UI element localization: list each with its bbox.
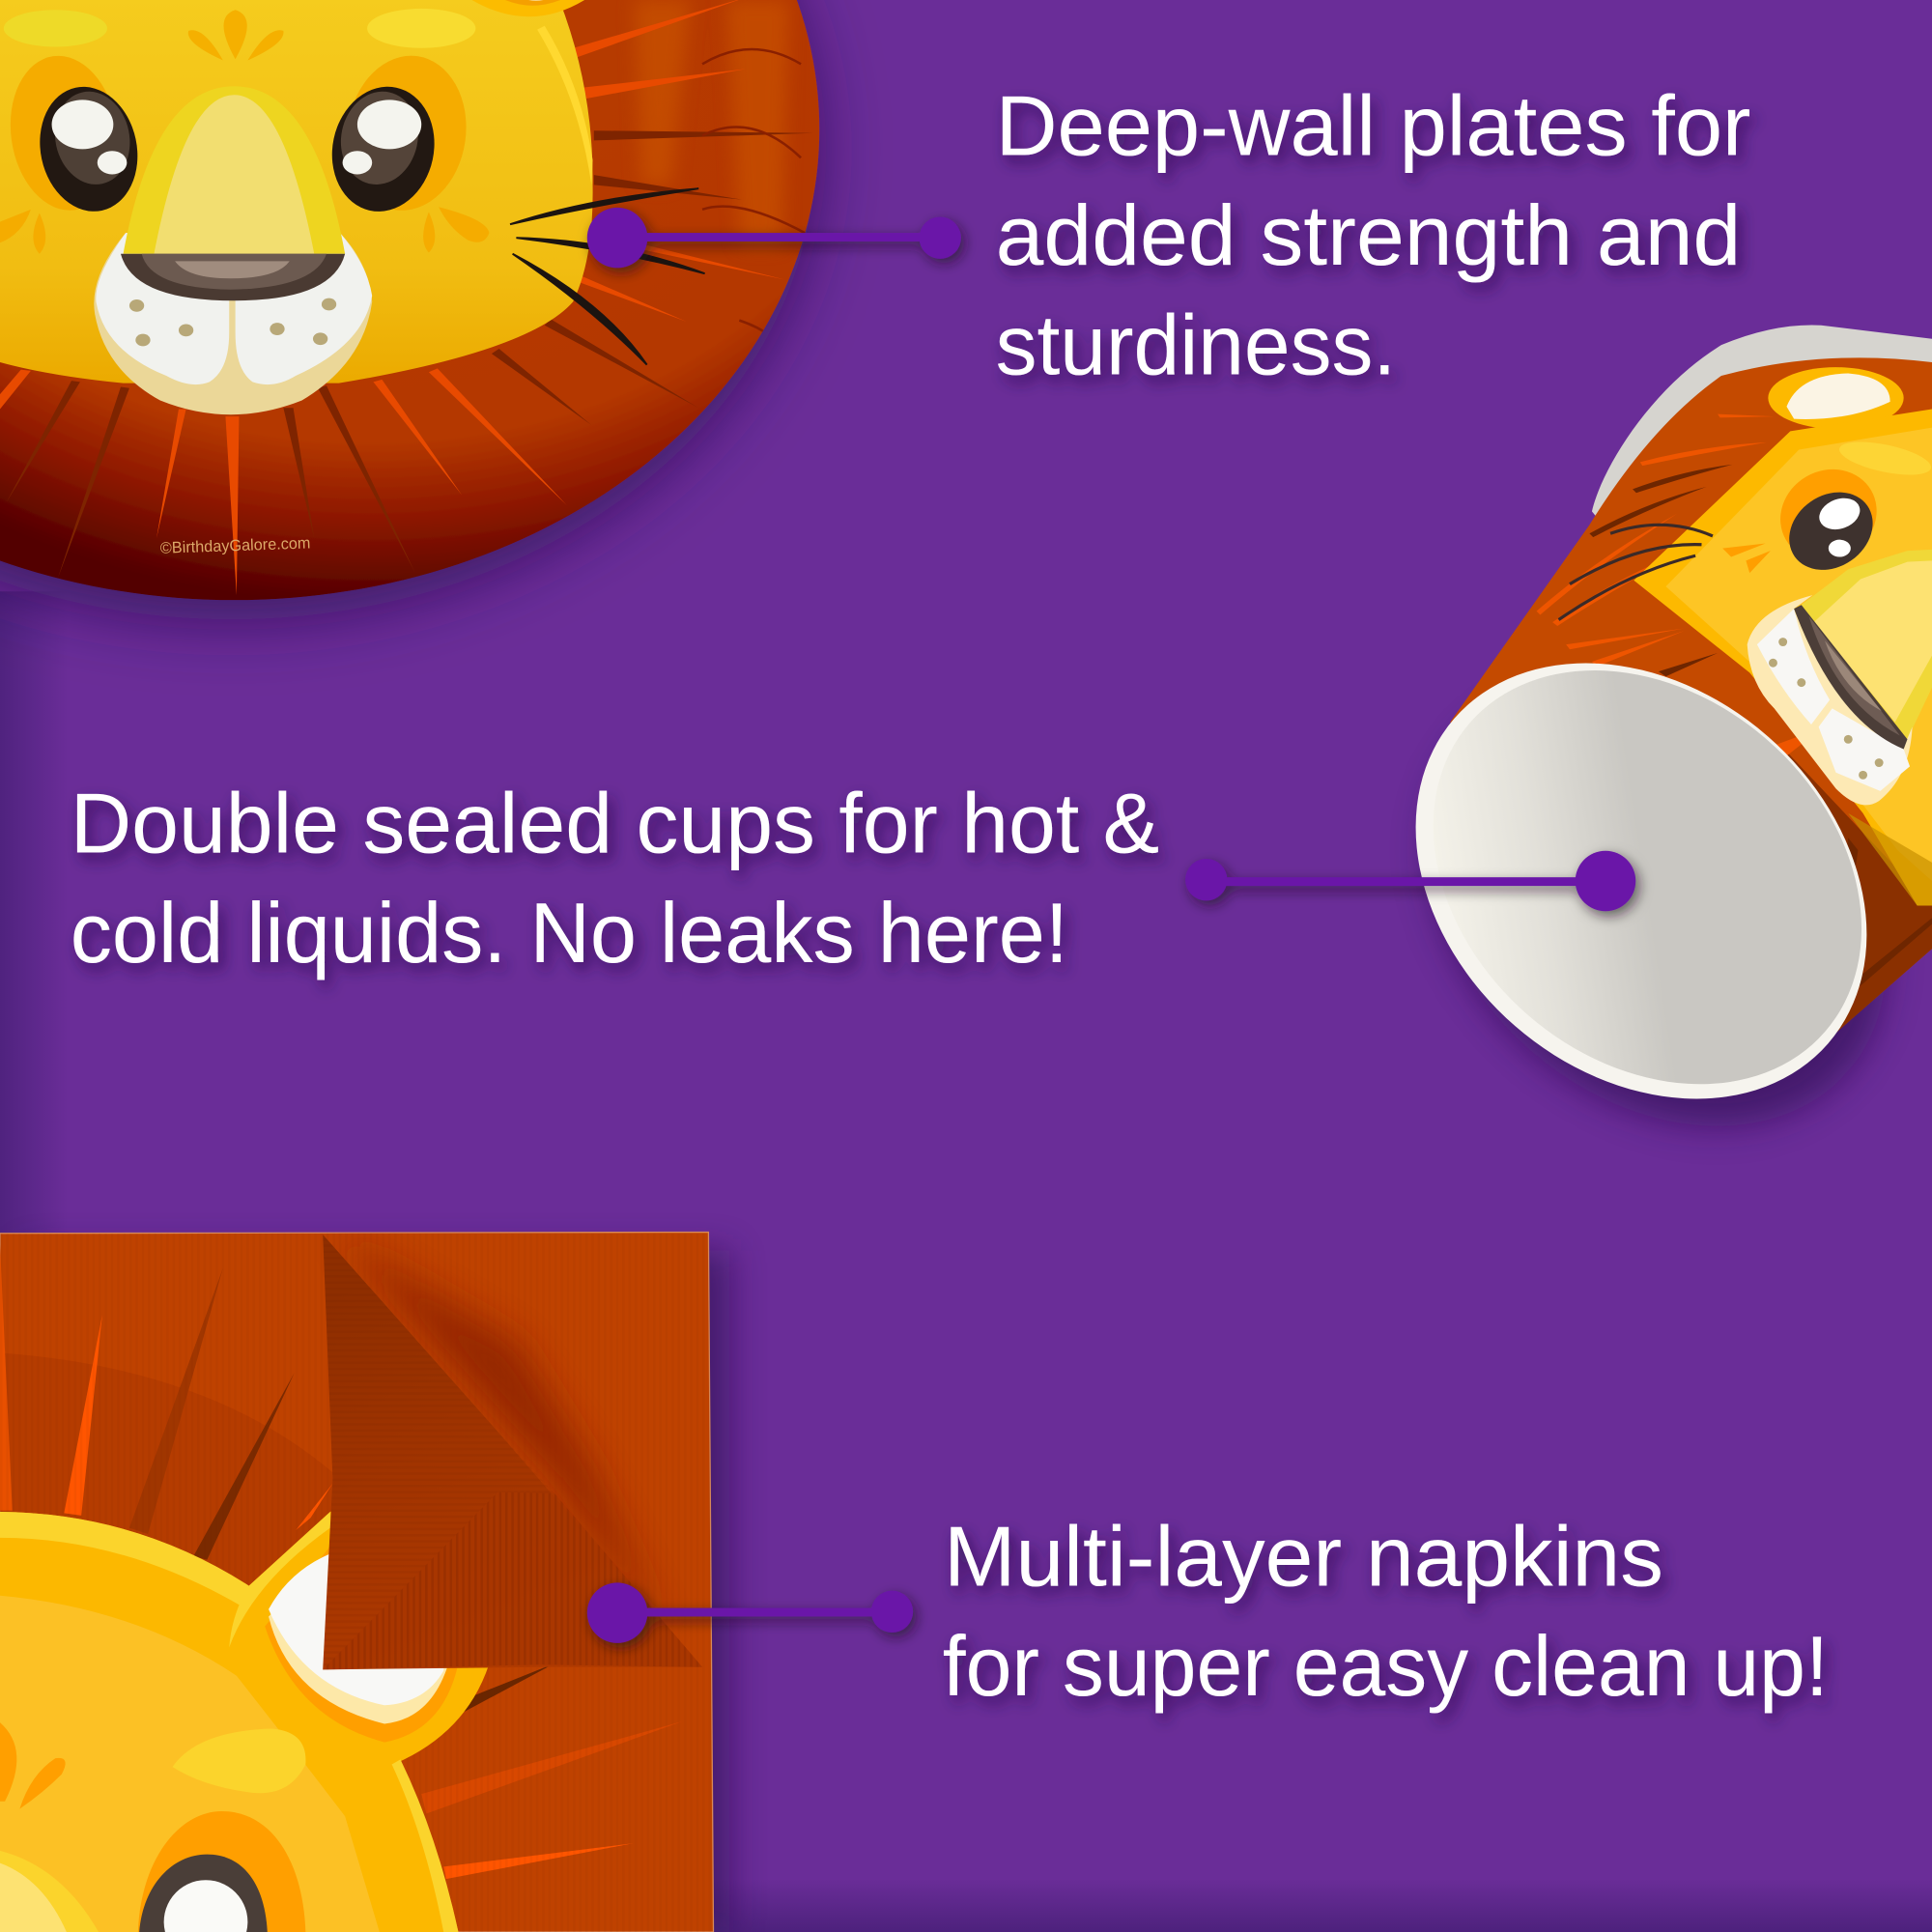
napkin sheet (0, 1233, 714, 1932)
cup eye (1780, 469, 1877, 545)
cup shadow (1341, 595, 1932, 1216)
head inner (0, 1596, 380, 1932)
cup mane (1787, 753, 1932, 1032)
napkin cheek highlight (173, 1729, 305, 1793)
plate (0, 0, 819, 600)
text: plates: added strength and (996, 187, 1741, 283)
nose (121, 86, 345, 300)
cheek marks (0, 207, 489, 254)
cup rim (1592, 325, 1932, 518)
fold shadow (355, 1246, 653, 1600)
cup base outer rim (1328, 574, 1932, 1188)
cup whiskers (1559, 525, 1713, 620)
connector: plate (587, 208, 961, 268)
cup muzzle (1747, 595, 1913, 805)
connector: napkin (587, 1582, 913, 1643)
text: plates: Deep-wall plates for (996, 78, 1750, 174)
plate copyright text: ©BirthdayGalore.com (160, 533, 311, 557)
text: napkins: for super easy clean up! (943, 1618, 1829, 1714)
text: plates (996, 78, 1750, 393)
forehead marks (188, 10, 284, 60)
ear (462, 0, 594, 16)
connector: cup (1185, 851, 1635, 911)
cup ear (1768, 367, 1904, 429)
napkin forehead marks (0, 1722, 66, 1808)
right eye (321, 48, 476, 221)
cup lion face (1634, 409, 1932, 906)
cup body (1450, 357, 1932, 1052)
napkin lion head and ear (0, 1491, 493, 1932)
whiskers (510, 188, 705, 365)
lion face (0, 0, 593, 384)
text: cups: Double sealed cups for hot & (71, 776, 1159, 871)
napkin eye (138, 1811, 305, 1932)
napkin nose (0, 1851, 99, 1932)
left eye (1, 49, 149, 220)
napkin rays (64, 1315, 634, 1879)
cup (1414, 325, 1932, 1141)
cup base disc (1350, 585, 1932, 1169)
napkin fold (323, 1235, 702, 1669)
text: napkins: Multi-layer napkins (944, 1509, 1663, 1605)
muzzle (94, 233, 372, 414)
text: cups: cold liquids. No leaks here! (71, 885, 1068, 980)
napkin ribs (68, 1323, 624, 1878)
cup cheek highlight (1839, 442, 1931, 475)
cheek highlights (4, 10, 107, 46)
napkin shadow (25, 1251, 729, 1932)
text: napkins (943, 1509, 1829, 1714)
mane rays (0, 0, 813, 595)
napkin mane band (0, 1353, 332, 1602)
ear inner (265, 1547, 458, 1743)
cup nose (1802, 550, 1932, 739)
napkin (0, 1233, 729, 1932)
plate body with shadow (0, 0, 819, 600)
bright head strips (0, 1512, 458, 1932)
text: cups (71, 776, 1159, 980)
text: plates: sturdiness. (996, 298, 1396, 393)
